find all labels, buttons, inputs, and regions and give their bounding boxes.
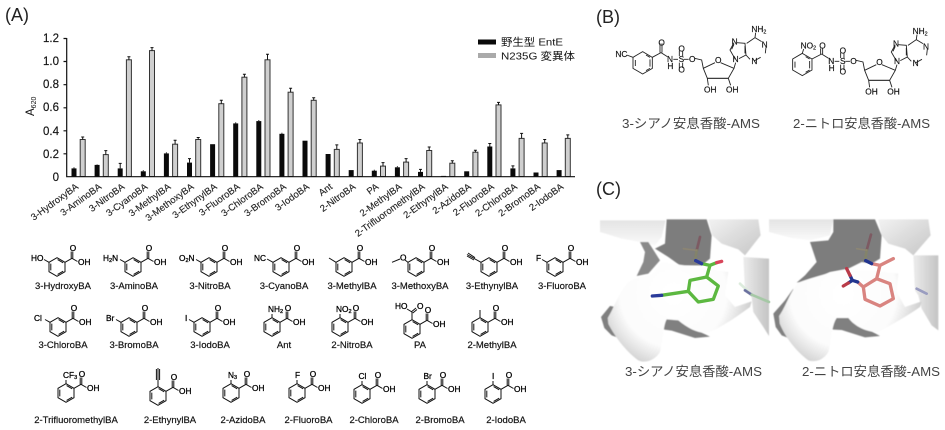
protein surface bbox=[600, 219, 769, 362]
3-NitroBA structure: OH bbox=[230, 257, 242, 267]
2-AzidoBA structure: O bbox=[244, 369, 251, 379]
wild type error bars bbox=[74, 120, 514, 172]
2-TrifluoromethylBA structure bbox=[58, 369, 99, 402]
y axis tick labels: 0.8 bbox=[43, 79, 59, 91]
3-ChloroBA structure: OH bbox=[79, 317, 91, 327]
structure names, row 1: 3-NitroBA bbox=[189, 281, 231, 292]
y axis tick labels: 0 bbox=[53, 172, 59, 184]
Ant structure bbox=[264, 303, 305, 336]
structure: 3-cyanobenzoic acid AMS: O bbox=[715, 55, 722, 65]
3-EthynylBA structure: O bbox=[502, 243, 509, 253]
2-BromoBA structure: O bbox=[440, 370, 447, 380]
bar chart: A620 by substrate bbox=[25, 33, 576, 240]
2-TrifluoromethylBA structure: O bbox=[79, 369, 86, 379]
structure: 2-nitrobenzoic acid AMS: O bbox=[840, 67, 847, 77]
2-EthynylBA structure: OH bbox=[179, 386, 191, 396]
faded neighbouring residue bbox=[683, 237, 769, 302]
3-FluoroBA structure: F bbox=[536, 253, 541, 263]
2-FluoroBA structure: F bbox=[295, 370, 300, 380]
3-EthynylBA structure: OH bbox=[510, 257, 522, 267]
PA structure: O bbox=[417, 301, 424, 311]
3-AminoBA structure: 2 bbox=[109, 258, 112, 264]
x axis substrate labels: 3-FluoroBA bbox=[197, 181, 243, 219]
PA structure: HO bbox=[395, 301, 408, 311]
structure names, row 1: 3-FluoroBA bbox=[538, 281, 587, 292]
structure names, row 3: 2-BromoBA bbox=[415, 415, 465, 426]
x axis substrate labels: 3-HydroxyBA bbox=[29, 181, 81, 223]
protein surface bbox=[769, 219, 938, 361]
y axis tick labels: 0.6 bbox=[43, 102, 59, 114]
2-AzidoBA structure: 3 bbox=[234, 375, 237, 381]
Ant structure: 2 bbox=[280, 309, 283, 315]
2-EthynylBA structure bbox=[150, 368, 191, 405]
structure names, row 1: 3-MethoxyBA bbox=[391, 281, 449, 292]
x axis substrate labels: 3-CyanoBA bbox=[104, 181, 151, 219]
x axis substrate labels: 3-IodoBA bbox=[273, 181, 312, 214]
legend: 野生型 EntE bbox=[501, 36, 563, 48]
2-BromoBA structure bbox=[419, 370, 460, 403]
structure: 3-cyanobenzoic acid AMS: N bbox=[732, 36, 738, 46]
mutant error bars bbox=[81, 48, 569, 166]
structure: 3-cyanobenzoic acid AMS: NH bbox=[751, 24, 763, 34]
x axis substrate labels: 2-IodoBA bbox=[527, 181, 566, 214]
3-FluoroBA structure: OH bbox=[576, 257, 588, 267]
structure names, row 3: 2-EthynylBA bbox=[144, 415, 197, 426]
x axis substrate labels: 2-FluoroBA bbox=[451, 181, 497, 219]
2-FluoroBA structure: O bbox=[310, 369, 317, 379]
structure: 2-nitrobenzoic acid AMS: O bbox=[840, 45, 847, 55]
caption: 3-cyano AMS: 3-シアノ安息香酸-AMS bbox=[622, 116, 760, 131]
3-AminoBA structure bbox=[103, 243, 166, 276]
structure: 3-cyanobenzoic acid AMS: OH bbox=[726, 84, 738, 94]
3-HydroxyBA structure: HO bbox=[31, 253, 44, 263]
2-FluoroBA structure: OH bbox=[318, 383, 330, 393]
2-AzidoBA structure: OH bbox=[252, 383, 264, 393]
y axis title: 620 bbox=[31, 97, 38, 108]
structure names, row 2: 3-BromoBA bbox=[109, 340, 159, 351]
y axis title: A bbox=[25, 108, 37, 116]
caption: 3-cyano pocket: 3-シアノ安息香酸-AMS bbox=[625, 364, 762, 379]
structure: 2-nitrobenzoic acid AMS: S bbox=[840, 56, 846, 66]
Ant structure: NH bbox=[268, 304, 280, 314]
x axis substrate labels: 2-EthynylBA bbox=[402, 181, 451, 221]
structure names, row 1: 3-MethylBA bbox=[327, 281, 377, 292]
2-ChloroBA structure: Cl bbox=[358, 371, 366, 381]
2-NitroBA structure: 2 bbox=[348, 309, 352, 315]
2-ChloroBA structure: OH bbox=[383, 384, 395, 394]
y axis tick labels bbox=[43, 33, 60, 184]
2-NitroBA structure bbox=[332, 303, 373, 336]
2-MethylBA structure bbox=[472, 303, 513, 336]
3-IodoBA structure bbox=[185, 303, 235, 336]
structure: 2-nitrobenzoic acid AMS: N bbox=[828, 56, 834, 66]
structure: 3-cyanobenzoic acid AMS: OH bbox=[704, 84, 716, 94]
3-IodoBA structure: I bbox=[185, 313, 187, 323]
x axis substrate labels: 3-AminoBA bbox=[59, 181, 104, 219]
structure names, row 3: 2-ChloroBA bbox=[349, 415, 399, 426]
panel label B: (B) bbox=[596, 7, 620, 27]
axes bbox=[64, 38, 575, 177]
PA structure: O bbox=[425, 305, 432, 315]
2-IodoBA structure bbox=[485, 370, 526, 403]
2-IodoBA structure: OH bbox=[514, 384, 526, 394]
wild type bars bbox=[72, 121, 562, 176]
substrate structures, row 3 bbox=[58, 368, 526, 405]
structure: 3-cyanobenzoic acid AMS: N bbox=[751, 56, 757, 66]
structure names, row 3: 2-TrifluoromethylBA bbox=[34, 415, 118, 426]
y axis tick labels: 1.2 bbox=[43, 33, 59, 45]
2-IodoBA structure: I bbox=[492, 371, 494, 381]
structure: 3-cyanobenzoic acid AMS: N bbox=[733, 54, 739, 64]
y axis tick labels: 0.4 bbox=[43, 126, 60, 138]
3-NitroBA structure: N bbox=[189, 253, 195, 263]
Ant structure: OH bbox=[293, 317, 305, 327]
y axis tick labels: 0.2 bbox=[43, 149, 59, 161]
structure: 2-nitrobenzoic acid AMS: 2 bbox=[925, 31, 928, 37]
substrate structures, row 1 bbox=[31, 243, 588, 276]
Ant structure: O bbox=[285, 303, 292, 313]
PA structure: OH bbox=[433, 319, 445, 329]
structure: 2-nitrobenzoic acid AMS: NO bbox=[801, 40, 813, 50]
x axis substrate labels: 3-MethoxyBA bbox=[144, 181, 197, 224]
structure names, row 3: 2-IodoBA bbox=[486, 415, 526, 426]
panel label A: (A) bbox=[5, 5, 29, 25]
2-BromoBA structure: OH bbox=[448, 384, 460, 394]
panel label C: (C) bbox=[596, 179, 621, 199]
structure: 2-nitrobenzoic acid AMS: N bbox=[923, 41, 929, 51]
2-TrifluoromethylBA structure: 3 bbox=[74, 375, 77, 381]
x axis substrate labels: 2-NitroBA bbox=[318, 181, 358, 215]
structure names, row 3 bbox=[34, 415, 526, 426]
caption: 2-nitro AMS: 2-ニトロ安息香酸-AMS bbox=[793, 116, 930, 131]
x axis substrate labels: Ant bbox=[317, 181, 335, 199]
x axis substrate labels: 3-MethylBA bbox=[127, 181, 174, 219]
x axis substrate labels: 2-AzidoBA bbox=[431, 181, 474, 217]
2-NitroBA structure: O bbox=[353, 303, 360, 313]
structure names, row 3: 2-FluoroBA bbox=[284, 415, 333, 426]
structure: 2-nitrobenzoic acid AMS: O bbox=[850, 56, 857, 66]
3-CyanoBA structure: O bbox=[294, 243, 301, 253]
structure: 3-cyanobenzoic acid AMS: S bbox=[679, 54, 685, 64]
structure: 2-nitrobenzoic acid AMS: O bbox=[876, 57, 883, 67]
structure: 3-cyanobenzoic acid AMS: NC bbox=[615, 49, 627, 59]
2-ChloroBA structure: O bbox=[375, 370, 382, 380]
structure: 2-nitrobenzoic acid AMS: NH bbox=[913, 26, 925, 36]
3-ChloroBA structure: Cl bbox=[34, 313, 42, 323]
x axis substrate labels bbox=[29, 181, 566, 240]
2-AzidoBA structure: N bbox=[228, 370, 234, 380]
y axis tick labels: 1.0 bbox=[43, 56, 59, 68]
x axis substrate labels: 2-MethylBA bbox=[358, 181, 405, 219]
x axis substrate labels: 3-BromoBA bbox=[242, 181, 289, 219]
x axis substrate labels: 2-TrifluoromethylBA bbox=[353, 181, 428, 240]
structure: 3-cyanobenzoic acid AMS: N bbox=[667, 54, 673, 64]
ligand: green sticks bbox=[652, 261, 722, 302]
3-AminoBA structure: O bbox=[146, 243, 153, 253]
substrate structures, row 2 bbox=[34, 301, 513, 338]
3-FluoroBA structure bbox=[536, 243, 588, 276]
3-MethylBA structure bbox=[329, 243, 377, 276]
structure: 3-cyanobenzoic acid AMS bbox=[615, 24, 768, 94]
2-NitroBA structure: NO bbox=[336, 304, 348, 314]
structure names, row 1 bbox=[35, 281, 587, 292]
structure names, row 3: 2-AzidoBA bbox=[221, 415, 266, 426]
structure names, row 1: 3-CyanoBA bbox=[260, 281, 309, 292]
3-HydroxyBA structure: OH bbox=[78, 257, 90, 267]
3-IodoBA structure: O bbox=[215, 303, 222, 313]
structure: 2-nitrobenzoic acid AMS bbox=[793, 26, 929, 96]
2-TrifluoromethylBA structure: CF bbox=[63, 370, 74, 380]
3-NitroBA structure: O bbox=[179, 253, 185, 263]
3-MethylBA structure: O bbox=[357, 243, 364, 253]
2-NitroBA structure: OH bbox=[361, 317, 373, 327]
structure names, row 2: Ant bbox=[277, 340, 291, 351]
structure: 3-cyanobenzoic acid AMS: O bbox=[658, 37, 665, 47]
3-MethoxyBA structure: OH bbox=[437, 257, 449, 267]
structure: 3-cyanobenzoic acid AMS: O bbox=[678, 65, 685, 75]
structure names, row 2: 2-NitroBA bbox=[331, 340, 373, 351]
x axis substrate labels: 3-NitroBA bbox=[87, 181, 127, 215]
3-NitroBA structure: 2 bbox=[185, 258, 189, 264]
caption: 2-nitro pocket: 2-ニトロ安息香酸-AMS bbox=[802, 364, 940, 379]
structure names, row 2: 2-MethylBA bbox=[467, 340, 517, 351]
x axis substrate labels: 2-BromoBA bbox=[497, 181, 543, 219]
3-MethylBA structure: OH bbox=[365, 257, 377, 267]
structure: 3-cyanobenzoic acid AMS: O bbox=[678, 43, 685, 53]
3-IodoBA structure: OH bbox=[223, 317, 235, 327]
3-CyanoBA structure: OH bbox=[302, 257, 314, 267]
x axis substrate labels: 3-EthynylBA bbox=[171, 181, 220, 221]
legend: N235G 変異体 bbox=[501, 50, 576, 62]
3-AminoBA structure: H bbox=[103, 253, 109, 263]
PA structure bbox=[395, 301, 445, 338]
binding pocket render: 2-nitro bbox=[769, 219, 938, 361]
structure names, row 2 bbox=[38, 340, 517, 351]
structure names, row 1: 3-HydroxyBA bbox=[35, 281, 92, 292]
structure names, row 2: 3-IodoBA bbox=[190, 340, 230, 351]
3-BromoBA structure bbox=[106, 303, 162, 336]
structure: 2-nitrobenzoic acid AMS: N bbox=[913, 58, 919, 68]
mutant bars bbox=[80, 51, 570, 176]
3-NitroBA structure bbox=[179, 243, 242, 276]
3-MethoxyBA structure: O bbox=[429, 243, 436, 253]
3-CyanoBA structure: NC bbox=[254, 253, 266, 263]
structure names, row 2: PA bbox=[414, 340, 427, 351]
3-MethoxyBA structure: O bbox=[400, 252, 407, 262]
legend bbox=[478, 36, 576, 62]
structure: 2-nitrobenzoic acid AMS: N bbox=[893, 38, 899, 48]
2-EthynylBA structure: O bbox=[171, 372, 178, 382]
2-TrifluoromethylBA structure: OH bbox=[87, 383, 99, 393]
3-ChloroBA structure: O bbox=[71, 303, 78, 313]
3-BromoBA structure: O bbox=[142, 303, 149, 313]
3-CyanoBA structure bbox=[254, 243, 314, 276]
structure: 3-cyanobenzoic acid AMS: 2 bbox=[763, 29, 766, 35]
binding pocket render: 3-cyano bbox=[600, 219, 769, 362]
structure: 2-nitrobenzoic acid AMS: O bbox=[819, 40, 826, 50]
3-ChloroBA structure bbox=[34, 303, 91, 336]
3-AminoBA structure: N bbox=[112, 253, 118, 263]
3-BromoBA structure: OH bbox=[150, 317, 162, 327]
2-BromoBA structure: Br bbox=[424, 371, 432, 381]
3-BromoBA structure: Br bbox=[106, 313, 115, 323]
faded neighbouring residue bbox=[857, 235, 927, 294]
structure: 2-nitrobenzoic acid AMS: OH bbox=[887, 86, 900, 96]
3-MethoxyBA structure bbox=[392, 243, 449, 276]
3-FluoroBA structure: O bbox=[568, 243, 575, 253]
2-MethylBA structure: O bbox=[493, 303, 500, 313]
3-AminoBA structure: OH bbox=[154, 257, 166, 267]
x axis substrate labels: 2-ChloroBA bbox=[473, 181, 520, 219]
x axis substrate labels: 3-ChloroBA bbox=[219, 181, 266, 219]
3-HydroxyBA structure bbox=[31, 243, 90, 276]
structure: 2-nitrobenzoic acid AMS: 2 bbox=[813, 46, 816, 52]
structure: 3-cyanobenzoic acid AMS: H bbox=[667, 61, 673, 71]
3-EthynylBA structure bbox=[467, 243, 522, 276]
structure: 3-cyanobenzoic acid AMS: O bbox=[689, 54, 696, 64]
structure names, row 1: 3-AminoBA bbox=[110, 281, 159, 292]
3-NitroBA structure: O bbox=[222, 243, 229, 253]
structure: 2-nitrobenzoic acid AMS: OH bbox=[865, 86, 878, 96]
2-ChloroBA structure bbox=[354, 370, 395, 403]
structure: 2-nitrobenzoic acid AMS: H bbox=[829, 63, 835, 73]
2-FluoroBA structure bbox=[289, 369, 330, 402]
structure names, row 2: 3-ChloroBA bbox=[38, 340, 88, 351]
x axis substrate labels: PA bbox=[365, 181, 382, 197]
3-HydroxyBA structure: O bbox=[70, 243, 77, 253]
structure names, row 1: 3-EthynylBA bbox=[466, 281, 519, 292]
2-MethylBA structure: OH bbox=[501, 317, 513, 327]
structure: 2-nitrobenzoic acid AMS: N bbox=[894, 56, 900, 66]
structure: 3-cyanobenzoic acid AMS: N bbox=[762, 39, 768, 49]
2-AzidoBA structure bbox=[223, 369, 264, 402]
ligand: pink sticks bbox=[843, 259, 893, 306]
2-IodoBA structure: O bbox=[506, 370, 513, 380]
